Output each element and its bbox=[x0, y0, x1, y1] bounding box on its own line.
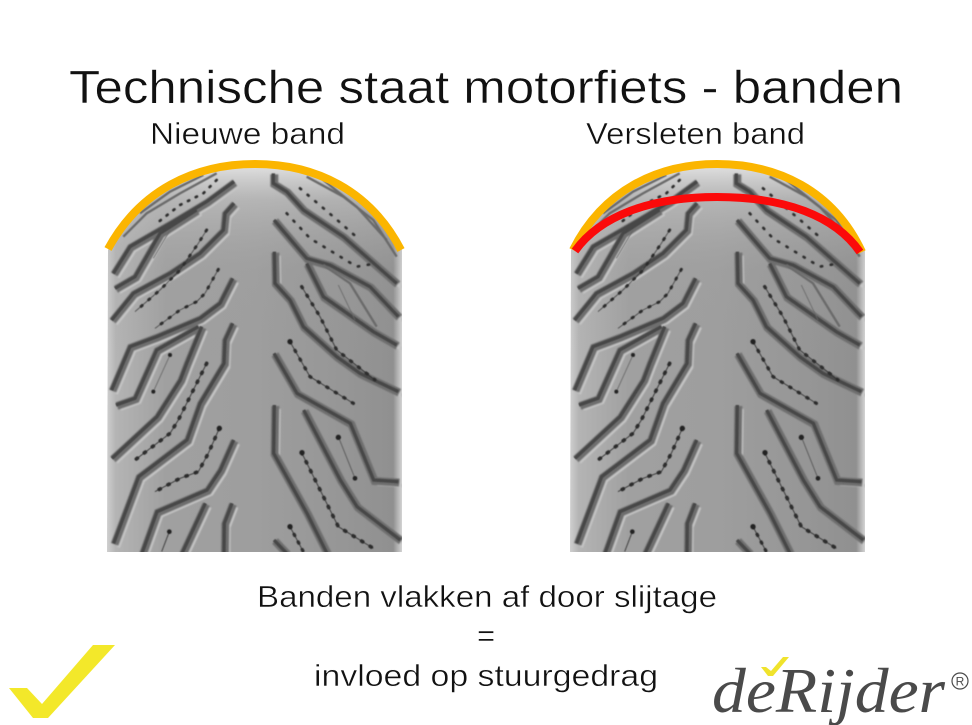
logo: deRijder: R bbox=[956, 674, 965, 688]
new tyre illustration bbox=[107, 160, 405, 557]
title: Technische staat motorfiets - banden bbox=[69, 61, 903, 113]
icon: yellow check mark bbox=[9, 645, 115, 718]
caption bbox=[257, 579, 717, 693]
worn tyre illustration bbox=[570, 160, 868, 557]
original profile arc bbox=[573, 164, 862, 252]
heading: worn tyre: Versleten band bbox=[586, 116, 805, 151]
caption: invloed op stuurgedrag bbox=[314, 658, 658, 693]
worn profile arc bbox=[575, 197, 860, 252]
heading: new tyre: Nieuwe band bbox=[150, 116, 345, 151]
logo: deRijder: deRijder bbox=[712, 655, 946, 725]
caption: Banden vlakken af door slijtage bbox=[257, 579, 717, 614]
caption: = bbox=[477, 618, 495, 653]
